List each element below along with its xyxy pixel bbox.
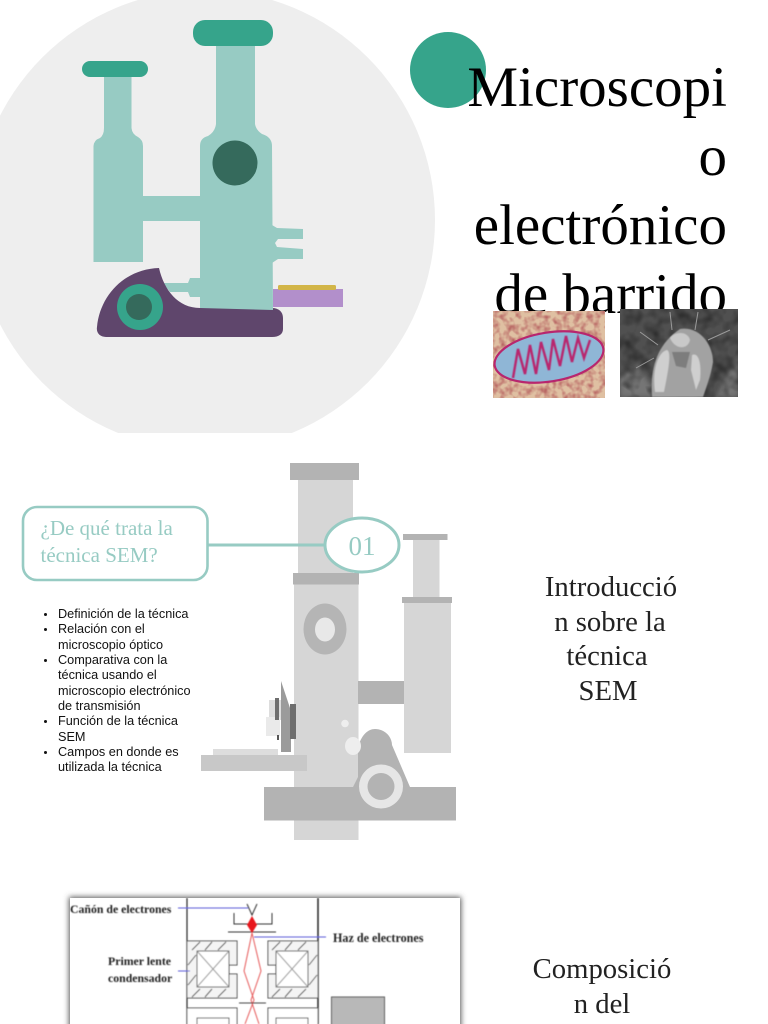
bullet list: Función de la técnica — [58, 714, 178, 728]
column lens ring — [304, 604, 346, 654]
shadow of diagram — [69, 897, 461, 1024]
bullet list: utilizada la técnica — [58, 760, 162, 774]
bullet list: de transmisión — [58, 699, 141, 713]
condenser lens left — [187, 941, 237, 998]
section text: composition: n del — [574, 988, 630, 1020]
dark lens circle — [212, 140, 258, 186]
base wheel — [117, 284, 163, 330]
small highlights — [341, 720, 361, 755]
stage — [201, 749, 307, 771]
title accent circle — [410, 32, 486, 108]
focus knobs — [272, 225, 303, 263]
callout text: ¿De qué trata la — [40, 516, 173, 540]
section text: composition: Composició — [533, 953, 671, 985]
electron source — [247, 916, 257, 933]
main column — [294, 584, 358, 840]
bullet list: microscopio electrónico — [58, 684, 191, 698]
title: Microscopi — [467, 56, 727, 119]
electron gun — [228, 904, 276, 932]
section text: introduction: Introducció — [545, 571, 677, 603]
left eyepiece cap — [82, 61, 148, 77]
callout text — [40, 516, 173, 566]
section text: introduction: técnica — [566, 640, 648, 672]
purple base — [97, 268, 283, 337]
upper cap — [290, 463, 359, 480]
photo: SEM mite micrograph — [620, 309, 738, 397]
label: electron gun: Cañón de electrones — [70, 902, 172, 916]
stage connector — [163, 278, 202, 297]
bullet list: SEM — [58, 730, 86, 744]
callout box — [23, 507, 208, 580]
connecting arm — [142, 196, 202, 221]
illustration: gray microscope — [201, 463, 456, 840]
main cap — [193, 20, 273, 46]
specimen block — [332, 997, 384, 1024]
label: electron beam: Haz de electrones — [333, 931, 424, 945]
callout text: técnica SEM? — [40, 542, 158, 566]
section text: introduction: SEM — [578, 674, 638, 706]
badge number: 01 — [348, 531, 376, 561]
connecting arm — [358, 681, 404, 704]
column walls — [187, 898, 318, 1024]
main body — [200, 46, 273, 310]
label: first condenser lens: condensador — [108, 971, 172, 985]
upper tube — [298, 480, 353, 575]
side tube — [402, 534, 452, 753]
photo: mitochondrion micrograph — [491, 311, 607, 398]
electron beam — [244, 933, 261, 1024]
bullet list — [44, 607, 191, 774]
label: first condenser lens: Primer lente — [108, 954, 171, 968]
title: de barrido — [494, 263, 727, 326]
bullet list: Definición de la técnica — [58, 607, 188, 621]
base with hump — [264, 729, 456, 820]
title: o — [698, 125, 727, 188]
left eyepiece tube — [94, 76, 143, 262]
diagram: SEM column — [70, 898, 460, 1024]
bullet list: Comparativa con la — [58, 653, 167, 667]
callout connector line — [207, 544, 326, 546]
condenser lens right — [268, 941, 318, 998]
bullet list: microscopio óptico — [58, 638, 163, 652]
title — [467, 56, 727, 326]
sample slide — [273, 285, 343, 307]
section text: introduction: n sobre la — [554, 606, 666, 638]
bullet list: Relación con el — [58, 622, 145, 636]
section text: composition — [533, 953, 671, 1020]
second lens — [187, 1003, 318, 1024]
illustration: teal microscope — [82, 20, 343, 337]
leader lines — [178, 908, 326, 971]
objective lens — [266, 681, 296, 752]
title: electrónico — [474, 194, 727, 257]
background circle — [0, 0, 435, 450]
bullet list: técnica usando el — [58, 668, 157, 682]
column collar — [293, 573, 359, 584]
number badge — [325, 518, 399, 572]
bullet list: Campos en donde es — [58, 745, 179, 759]
base wheel ring — [359, 764, 403, 808]
section text: introduction — [545, 571, 677, 706]
